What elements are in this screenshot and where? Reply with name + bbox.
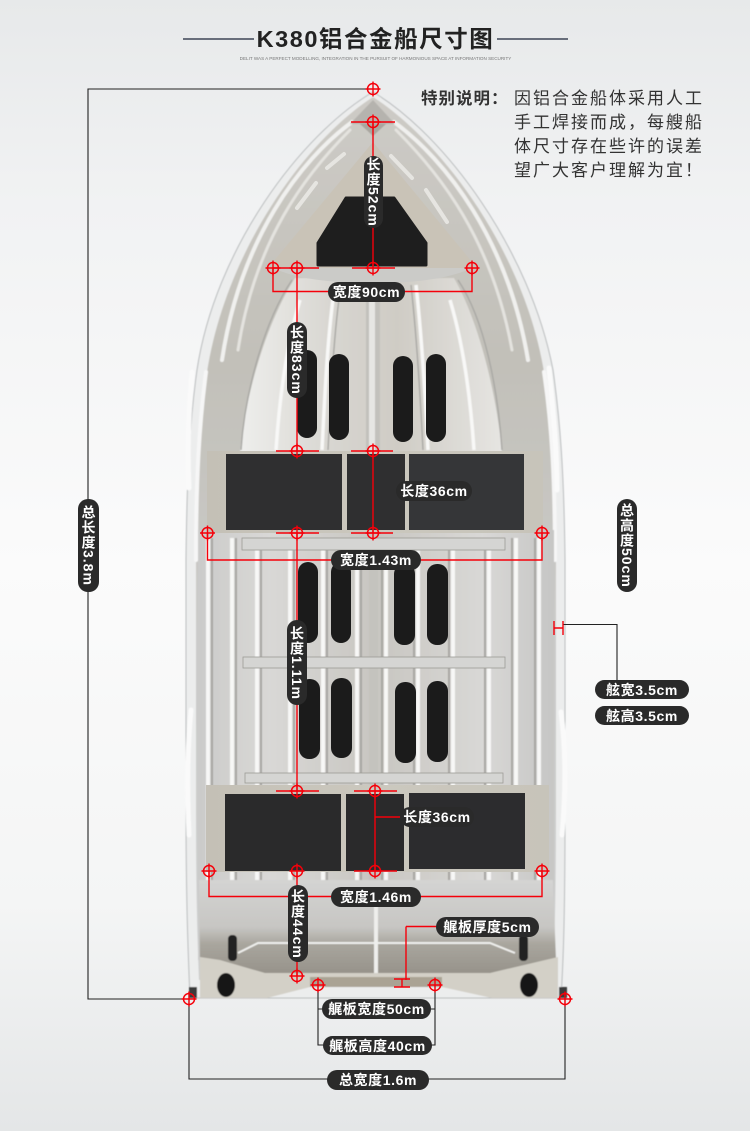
measurement markers (182, 82, 572, 1006)
label: gunwale height: 舷高3.5cm (606, 708, 678, 724)
label: forward seat width (331, 550, 421, 570)
stern clips (189, 987, 567, 998)
note text: 望广大客户理解为宜！ (514, 161, 704, 180)
label: overall length: 总长度3.8m (80, 505, 96, 586)
keel strip (366, 295, 380, 452)
forward floor (240, 278, 502, 452)
label: transom thickness (436, 917, 539, 937)
anti-slip pads (297, 350, 448, 763)
red dimension lines (208, 122, 563, 987)
cross bars (242, 538, 505, 783)
label: aft seat length: 长度36cm (403, 809, 471, 825)
label: aft seat width (331, 887, 421, 907)
aft well (199, 880, 556, 974)
label: bow width: 宽度90cm (333, 284, 400, 300)
label: gunwale width: 舷宽3.5cm (606, 682, 678, 698)
stern drains (217, 973, 538, 997)
title: K380铝合金船尺寸图 (257, 26, 494, 52)
black dimension lines (88, 89, 617, 1079)
label: transom width: 艉板宽度50cm (328, 1001, 425, 1017)
label: forward seat width: 宽度1.43m (340, 552, 412, 568)
note text (514, 89, 704, 180)
boat hull (186, 92, 567, 998)
note text: 因铝合金船体采用人工 (514, 89, 704, 108)
label: middle floor length: 长度1.11m (289, 626, 305, 699)
label: gunwale height (595, 706, 689, 725)
label: bow length: 长度52cm (366, 157, 382, 227)
subtitle: DELIT WAS A PERFECT MODELLING, INTEGRATION IN THE PURSUIT OF HARMONIOUS SPACE AT INFORMATION SECURITY (240, 56, 511, 61)
label: overall width (327, 1070, 429, 1090)
aft floor (198, 530, 554, 960)
note text: 手工焊接而成，每艘船 (514, 113, 704, 132)
label: overall length (78, 499, 99, 592)
transom (200, 957, 558, 998)
aft seat (206, 785, 549, 872)
header rules (183, 38, 568, 40)
label: aft seat width: 宽度1.46m (340, 889, 412, 905)
bow tip grate (350, 100, 395, 124)
label: gunwale width (595, 680, 689, 699)
label: overall width: 总宽度1.6m (339, 1072, 417, 1088)
label: transom height: 艉板高度40cm (329, 1038, 426, 1054)
forward seat (207, 451, 543, 533)
bow triangle deck (273, 142, 472, 283)
label: transom thickness: 艉板厚度5cm (443, 919, 532, 935)
label: forward seat length: 长度36cm (400, 483, 468, 499)
label: overall height: 总高度50cm (619, 503, 635, 588)
label: middle floor length (287, 620, 307, 705)
bow ribs (196, 122, 555, 560)
label: aft floor length: 长度44cm (290, 889, 306, 958)
note heading: 特别说明： (421, 90, 508, 108)
note text: 体尺寸存在些许的误差 (514, 137, 704, 156)
label: forward floor length: 长度83cm (289, 325, 305, 395)
side handles (188, 368, 565, 835)
